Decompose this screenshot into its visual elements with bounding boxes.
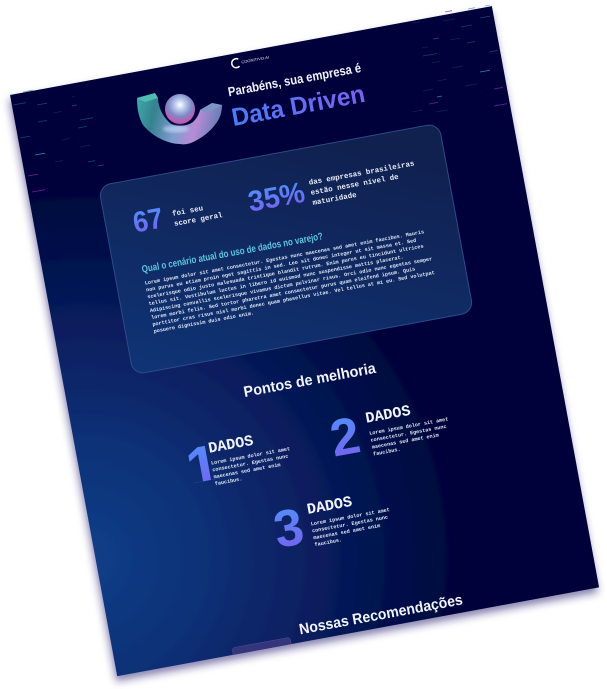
stat caption: das empresas brasileiras: [308, 160, 416, 188]
item 2 text: consectetur. Egestas nunc: [370, 424, 447, 444]
stat caption: maturidade: [312, 192, 358, 208]
item 1 text: faucibus.: [214, 476, 243, 487]
title: Data Driven: Data Driven: [229, 80, 367, 132]
crescent top face left: [137, 93, 158, 102]
score caption: foi seu: [172, 205, 204, 219]
recommendation card top: [232, 637, 292, 655]
item 2 text: Lorem ipsum dolor sit amet: [369, 416, 449, 437]
card body text: Adipiscing convallis scelerisque vivamus dictum pulvinar risus. Orci odio nunc egestas semper: [149, 256, 433, 314]
card body text: lorem morbi felis. Sed tortor pharetra amet consectetur purus quam eleifend ipsum. Quis: [151, 266, 416, 321]
score caption: [172, 206, 222, 226]
stat caption: [309, 162, 414, 205]
number 1: 1: [181, 432, 225, 503]
item 3 text: [311, 508, 390, 546]
item 2 title: DADOS: [364, 402, 412, 428]
crescent inner glow: [163, 126, 189, 132]
crescent: [137, 93, 222, 144]
item 3 text: Lorem ipsum dolor sit amet: [310, 507, 390, 527]
brand logo: COGNITIVO.AI: [241, 55, 269, 64]
item 3: [274, 496, 390, 546]
sphere: [165, 94, 195, 124]
heading: Pontos de melhoria: Pontos de melhoria: [242, 360, 378, 401]
brand logo: [231, 56, 269, 68]
card body text: tellus sit. Vestibulum luctus in libero id euismod nunc suspendisse mattis placerat.: [148, 254, 404, 307]
illustration: 3D crescent with sphere: [137, 93, 222, 144]
item 1 text: maecenas sed amet enim: [213, 462, 281, 480]
heading: Nossas Recomendações: Nossas Recomendações: [298, 591, 464, 638]
score 67: 67: [130, 203, 166, 239]
decorative data streaks: [10, 5, 507, 192]
item 1 title: DADOS: [207, 432, 255, 458]
number 3: 3: [269, 497, 308, 560]
item 2 text: maecenas sed amet enim: [371, 432, 439, 451]
item 3 text: faucibus.: [314, 537, 343, 548]
page content: [100, 56, 472, 655]
crescent top face right: [200, 103, 222, 113]
item 1 text: consectetur. Egestas nunc: [212, 454, 289, 473]
card heading: Qual o cenário atual do uso de dados no varejo?: [141, 231, 324, 275]
panel: score card: [98, 123, 474, 375]
item 2 text: faucibus.: [373, 447, 401, 458]
item 1 text: Lorem ipsum dolor sit amet: [211, 446, 291, 467]
number 2: 2: [326, 406, 365, 469]
item 2 text: [370, 417, 448, 456]
card body text: posuere dignissim duis odio enim.: [153, 310, 255, 335]
card body text: Lorem ipsum dolor sit amet consectetur. Egestas nunc maecenas sed amet enim faucibus. Mauris: [144, 229, 425, 287]
score caption: score geral: [174, 212, 224, 229]
item 1: [188, 435, 290, 486]
item 2: [331, 405, 448, 456]
card body text: [144, 229, 437, 335]
intro line: Parabéns, sua empresa é: [227, 60, 362, 99]
stat caption: estão nesse nível de: [310, 174, 400, 198]
item 3 title: DADOS: [306, 493, 354, 519]
item 3 text: maecenas sed amet enim: [313, 523, 381, 541]
card body text: non purus eu etiam proin eget sagittis in sed. Leo sit donec integer ut sit massa et. Sed: [146, 238, 417, 293]
item 1 text: [211, 447, 290, 486]
card body text: porttitor cras risus nisl morbi donec quam phasellus vitae. Vel tellus at mi eu. Sed volutpat: [152, 270, 435, 328]
stat 35%: 35%: [246, 177, 308, 219]
item 3 text: consectetur. Egestas nunc: [312, 514, 389, 534]
card body text: scelerisque odio justo malesuada tristique blandit rutrum. Enim purus eu tincidunt ultrices: [147, 244, 424, 300]
